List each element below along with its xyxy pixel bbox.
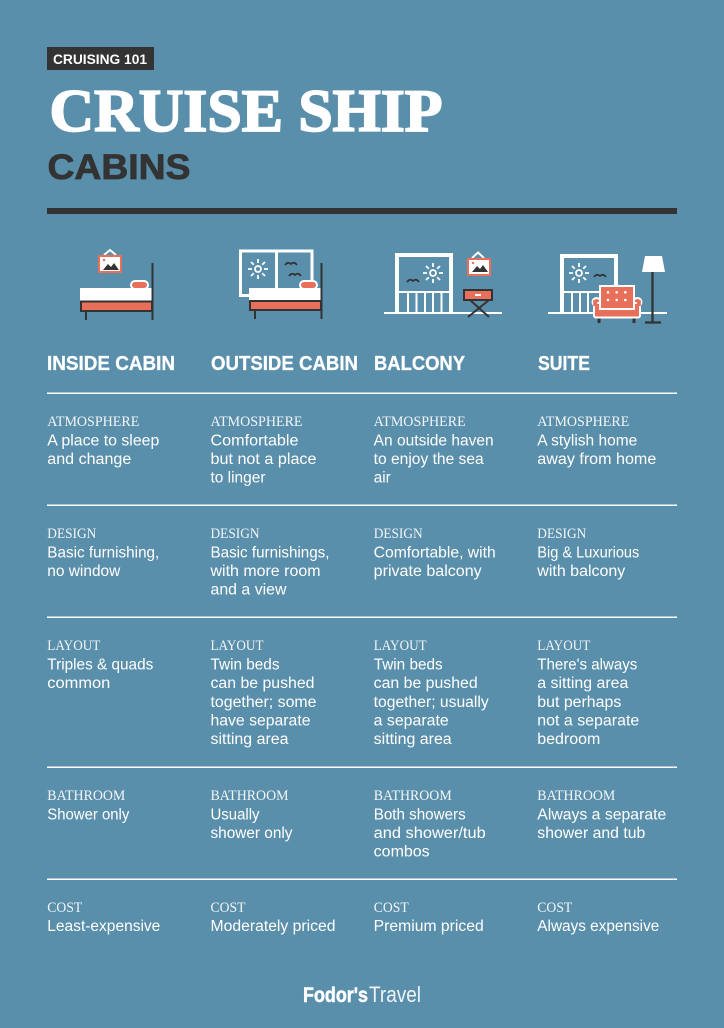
row: bathroom: Usually	[210, 806, 260, 824]
row: atmosphere: ATMOSPHERE	[374, 414, 466, 430]
row: bathroom: BATHROOM	[210, 788, 288, 804]
row: layout: Triples & quads	[47, 656, 154, 674]
row: design: Basic furnishings,	[210, 544, 330, 562]
row: bathroom: and shower/tub	[374, 825, 486, 842]
row: layout: Twin beds	[374, 656, 443, 674]
row: cost: COST	[537, 900, 572, 916]
title: Cruise Ship: CRUISE SHIP	[50, 78, 443, 144]
row: bathroom: Shower only	[47, 806, 130, 824]
row: bathroom: BATHROOM	[47, 788, 125, 804]
row: bathroom: combos	[374, 844, 430, 860]
logo: Fodor's Travel: Fodor's	[303, 984, 368, 1007]
row: design: with more room	[209, 563, 320, 580]
row: atmosphere: to enjoy the sea	[374, 451, 484, 468]
row: bathroom	[47, 788, 666, 860]
row: layout	[47, 638, 639, 748]
icon: suite window, sofa and floor lamp	[548, 256, 667, 323]
row: design: Big & Luxurious	[537, 544, 640, 562]
icon: inside cabin bed	[80, 250, 152, 320]
row: layout: sitting area	[210, 731, 289, 748]
row: atmosphere	[47, 414, 656, 486]
row: layout: but perhaps	[537, 694, 622, 711]
row: design	[47, 526, 640, 598]
row: atmosphere: ATMOSPHERE	[47, 414, 139, 430]
subtitle: Cabins: CABINS	[48, 148, 190, 187]
row: layout: together; usually	[374, 694, 489, 711]
row: layout: together; some	[210, 694, 316, 711]
row: atmosphere: A place to sleep	[47, 432, 159, 450]
header badge: Cruising 101: CRUISING 101	[53, 52, 147, 67]
row: atmosphere: air	[374, 470, 391, 486]
row: layout: a sitting area	[537, 675, 629, 692]
row: atmosphere: and change	[47, 451, 131, 468]
row: cost: COST	[47, 900, 82, 916]
row: cost: Least-expensive	[47, 918, 160, 935]
row: layout: LAYOUT	[537, 638, 590, 654]
row: cost: Premium priced	[374, 918, 484, 935]
row: layout: sitting area	[374, 731, 452, 748]
row: layout: common	[47, 675, 110, 692]
row: bathroom: shower only	[210, 825, 293, 842]
column headings: SUITE	[538, 353, 590, 375]
row: bathroom: shower and tub	[537, 825, 645, 842]
row: atmosphere: away from home	[537, 451, 656, 468]
row: layout: a separate	[374, 712, 449, 730]
row: layout: LAYOUT	[210, 638, 264, 654]
logo: Fodor's Travel: Travel	[369, 982, 421, 1007]
row: bathroom: BATHROOM	[374, 788, 452, 804]
row: design: DESIGN	[374, 526, 423, 542]
row: atmosphere: A stylish home	[537, 432, 637, 450]
row: cost: COST	[210, 900, 246, 916]
row: atmosphere: An outside haven	[374, 432, 494, 450]
row: design: private balcony	[374, 563, 482, 580]
row: layout: LAYOUT	[47, 638, 100, 654]
row: design: DESIGN	[210, 526, 260, 542]
row: layout: have separate	[210, 712, 310, 730]
row: cost: Always expensive	[537, 918, 659, 935]
row: layout: can be pushed	[210, 675, 314, 692]
row: layout: can be pushed	[374, 675, 478, 692]
row: layout: LAYOUT	[374, 638, 427, 654]
row: design: and a view	[210, 582, 287, 598]
row: design: no window	[47, 563, 121, 580]
column headings: OUTSIDE CABIN	[211, 353, 358, 375]
row: bathroom: Both showers	[374, 806, 466, 824]
icon: outside cabin window and bed	[240, 251, 322, 319]
row: design: Basic furnishing,	[47, 544, 159, 562]
row: bathroom: BATHROOM	[537, 788, 615, 804]
row: layout: Twin beds	[210, 656, 280, 674]
icon: balcony window, picture and side table	[384, 252, 502, 317]
row: atmosphere: but not a place	[210, 451, 316, 468]
header badge: Cruising 101	[47, 47, 154, 70]
row: layout: not a separate	[537, 712, 639, 730]
logo: Fodor's Travel	[303, 982, 421, 1007]
row: layout: bedroom	[537, 731, 600, 748]
row: design: DESIGN	[47, 526, 96, 542]
column headings	[47, 353, 590, 375]
row: design: DESIGN	[537, 526, 586, 542]
row: atmosphere: ATMOSPHERE	[210, 414, 302, 430]
row: bathroom: Always a separate	[537, 806, 666, 824]
column headings: INSIDE CABIN	[47, 353, 175, 375]
row: cost: COST	[374, 900, 409, 916]
row: design: Comfortable, with	[374, 544, 496, 562]
column headings: BALCONY	[374, 353, 466, 375]
row: cost	[47, 900, 659, 935]
row: atmosphere: Comfortable	[210, 432, 298, 450]
row: design: with balcony	[536, 563, 626, 580]
row: cost: Moderately priced	[210, 918, 336, 935]
row: atmosphere: to linger	[210, 470, 266, 486]
row: layout: There's always	[537, 656, 638, 674]
row: atmosphere: ATMOSPHERE	[537, 414, 629, 430]
